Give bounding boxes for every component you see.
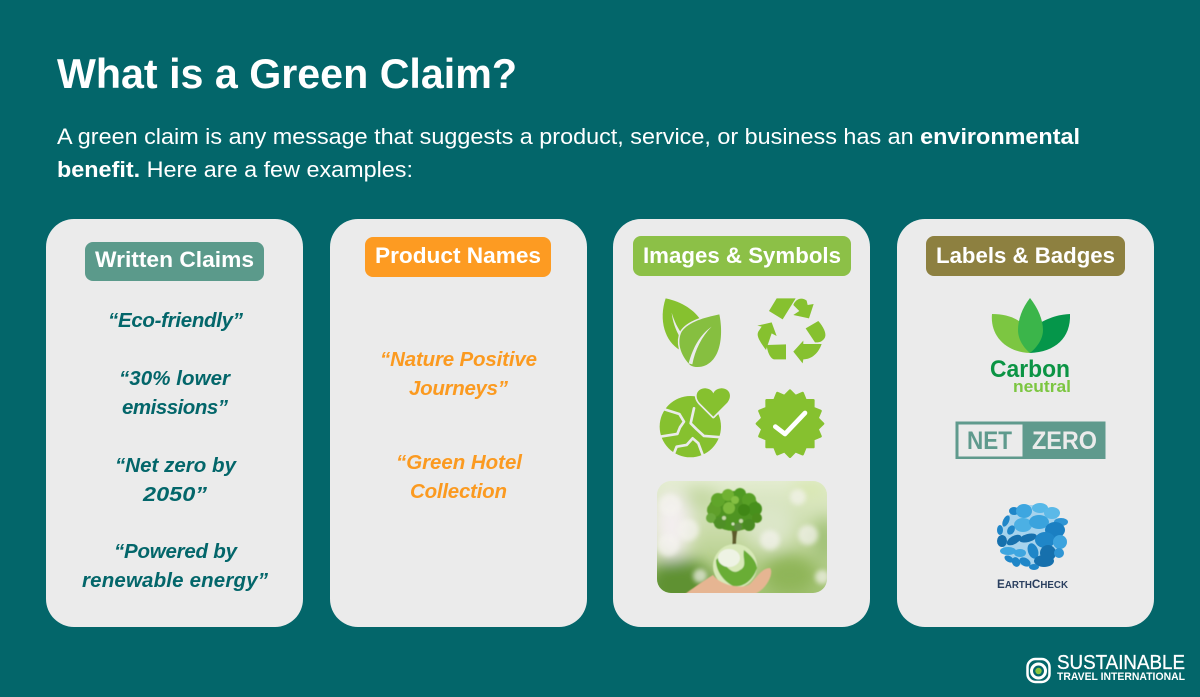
written claim examples: emissions”	[122, 396, 229, 419]
title: What is a Green Claim?	[57, 50, 517, 97]
hand	[685, 568, 771, 594]
photo: tree on glass globe in hand	[657, 481, 827, 593]
tree crown	[706, 488, 762, 531]
intro text: benefit. Here are a few examples:	[57, 157, 413, 182]
logo: earthcheck	[997, 503, 1069, 591]
logo: sustainable travel international: TRAVEL INTERNATIONAL	[1057, 671, 1185, 683]
heading pill: product names	[365, 237, 551, 277]
logo: earthcheck: EARTHCHECK	[997, 577, 1069, 591]
panel: labels and badges	[897, 219, 1154, 627]
panel: written claims	[46, 219, 303, 627]
intro text	[57, 124, 1080, 182]
icon: earth with heart	[660, 388, 730, 457]
heading pill: labels and badges: Labels & Badges	[936, 243, 1115, 268]
logo: sustainable travel international: SUSTAINABLE	[1057, 652, 1185, 674]
glass globe	[713, 544, 757, 588]
logo: carbon neutral: Carbon	[990, 356, 1070, 383]
icon: leaves	[663, 298, 721, 367]
tree trunk	[731, 530, 738, 545]
heading pill: images and symbols	[633, 236, 851, 276]
product name examples: Collection	[410, 480, 507, 503]
written claim examples: “Powered by	[114, 540, 239, 563]
logo: sustainable travel international	[1028, 652, 1185, 683]
heading pill: written claims	[85, 242, 264, 281]
heading pill: product names: Product Names	[375, 243, 541, 268]
logo: net zero: NET	[967, 427, 1012, 455]
logo: carbon neutral	[990, 298, 1071, 396]
written claim examples: renewable energy”	[82, 569, 269, 592]
panel: product names	[330, 219, 587, 627]
intro text: A green claim is any message that suggests a product, service, or business has an environmental	[57, 124, 1080, 149]
heading pill: written claims: Written Claims	[95, 247, 254, 272]
logo: carbon neutral: neutral	[1013, 378, 1071, 396]
logo: net zero	[956, 422, 1106, 459]
icon: recycling arrows	[757, 298, 825, 363]
product name examples: “Nature Positive	[380, 348, 537, 371]
heading pill: images and symbols: Images & Symbols	[643, 243, 841, 268]
logo mark	[1028, 659, 1050, 682]
written claim examples	[82, 309, 269, 592]
panel: images and symbols	[613, 219, 870, 627]
product name examples: “Green Hotel	[396, 451, 523, 474]
written claim examples: 2050”	[142, 483, 208, 506]
written claim examples: “30% lower	[119, 367, 231, 390]
heading pill: labels and badges	[926, 236, 1125, 276]
written claim examples: “Eco-friendly”	[108, 309, 244, 332]
product name examples: Journeys”	[409, 377, 509, 400]
logo: net zero: ZERO	[1032, 427, 1097, 455]
icon: verified badge	[757, 391, 823, 457]
written claim examples: “Net zero by	[115, 454, 238, 477]
product name examples	[380, 348, 537, 503]
